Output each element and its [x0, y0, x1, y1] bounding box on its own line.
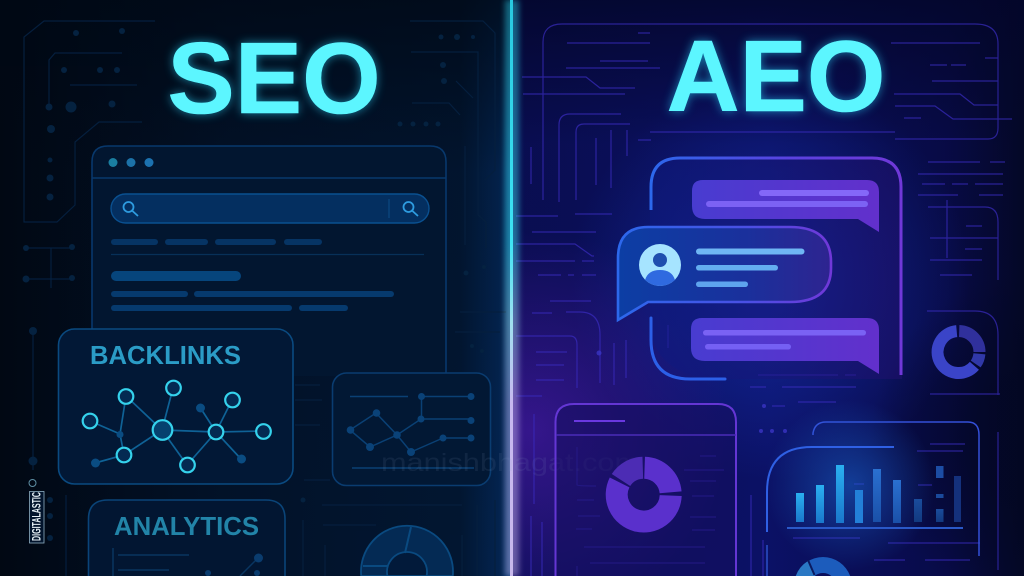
panel: right AEO background — [511, 0, 1024, 576]
panel: analytics — [88, 500, 285, 576]
chart: small donut — [796, 557, 850, 576]
chat bubble: bottom — [691, 318, 879, 374]
chat bubble: user — [618, 227, 831, 320]
panel: side graph — [332, 373, 490, 486]
chat bubble: top — [692, 180, 879, 232]
logo: Digitalastic — [29, 480, 44, 543]
watermark: manishbhagat.com — [381, 449, 640, 477]
bars — [796, 465, 961, 523]
label: ANALYTICS: ANALYTICS — [114, 513, 259, 541]
heading: AEO: AEO — [667, 21, 885, 133]
circuit traces, right — [516, 24, 1012, 576]
panel: left SEO background — [0, 0, 511, 576]
icon: magnifier right — [404, 202, 418, 216]
chart: donut bottom left — [361, 526, 453, 576]
chart: donut — [617, 468, 671, 522]
label: BACKLINKS: BACKLINKS — [90, 342, 241, 370]
network graph — [83, 381, 271, 472]
heading: SEO: SEO — [167, 23, 381, 135]
divider line — [505, 0, 519, 576]
panel: chat frame — [618, 157, 902, 379]
logo: Digitalastic: DIGITALASTIC — [30, 492, 44, 541]
icon: user avatar — [639, 244, 681, 286]
result lines — [111, 271, 394, 311]
panel: bar chart — [765, 400, 979, 576]
panel: browser search window — [92, 146, 446, 376]
panel: donut report — [556, 404, 736, 576]
search bar — [111, 194, 429, 223]
result tabs — [111, 239, 322, 245]
heading: SEO: SEO — [167, 23, 381, 135]
circuit traces, left — [24, 21, 506, 576]
heading: AEO: AEO — [667, 21, 885, 133]
chart: donut right — [938, 331, 980, 373]
icon: magnifier left — [124, 202, 138, 216]
window dots — [108, 158, 154, 167]
panel: backlinks — [58, 329, 293, 484]
